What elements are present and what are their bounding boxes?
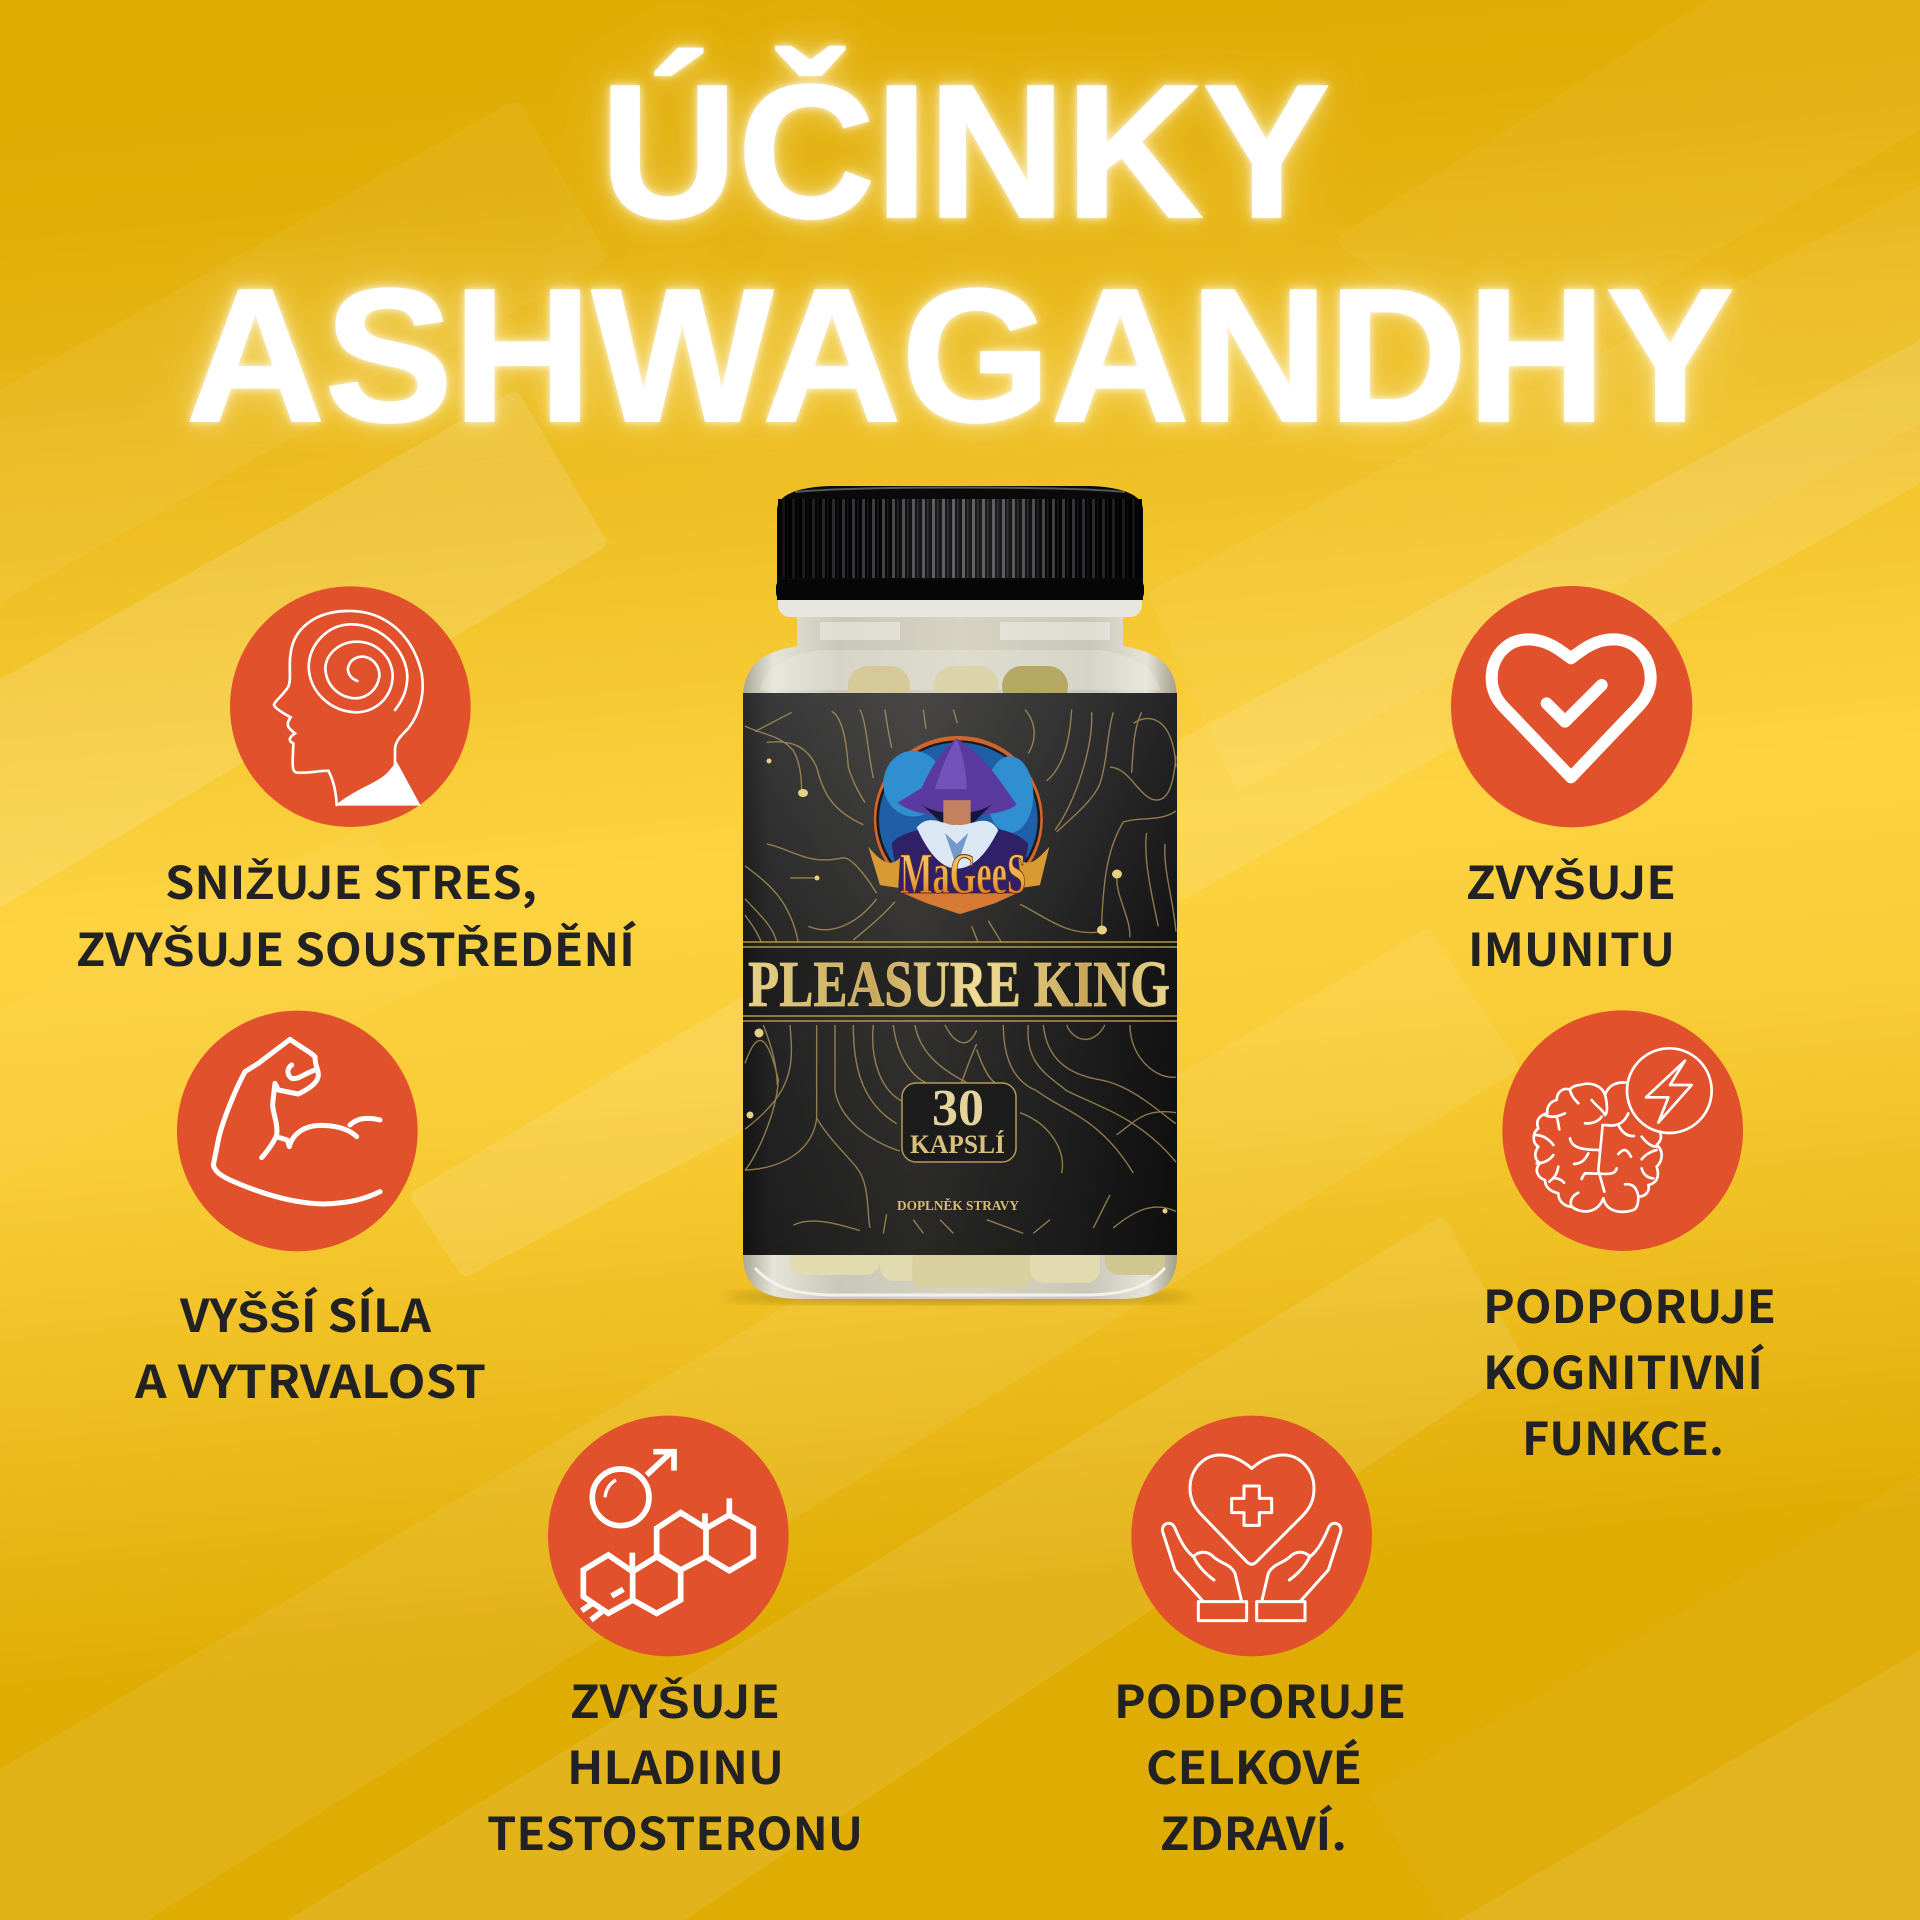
benefit: overall health bbox=[1114, 1416, 1406, 1863]
label: ZVYŠUJE bbox=[570, 1666, 780, 1731]
icon: heart with check bbox=[1451, 586, 1692, 827]
label bbox=[1466, 847, 1676, 979]
label bbox=[743, 693, 1177, 1255]
gold dots bbox=[746, 758, 1168, 1214]
jar base highlight bbox=[755, 1268, 1165, 1295]
label bbox=[134, 1280, 486, 1411]
label: ZVYŠUJE SOUST ŘEDĚNÍ bbox=[76, 914, 636, 979]
product bottle bbox=[723, 486, 1193, 1304]
label bbox=[1114, 1666, 1406, 1863]
benefit: strength bbox=[134, 1011, 486, 1411]
benefit: immunity bbox=[1451, 586, 1692, 979]
label: IMUNITU bbox=[1468, 914, 1675, 979]
label bbox=[76, 847, 636, 979]
band lines bbox=[743, 942, 1177, 1021]
neck ring bbox=[778, 590, 1142, 617]
icon: head with spiral bbox=[230, 586, 471, 827]
title: ASHWAGANDHY bbox=[186, 250, 1734, 462]
icon: hands holding heart bbox=[1131, 1416, 1372, 1656]
benefit: cognition bbox=[1483, 1010, 1776, 1468]
benefit: stress bbox=[76, 586, 636, 979]
label: CELKOVÉ bbox=[1146, 1732, 1362, 1797]
icon: flexed arm bbox=[177, 1011, 418, 1251]
label: VYŠŠÍ SÍLA bbox=[179, 1280, 432, 1345]
label: ZDRAVÍ. bbox=[1160, 1798, 1347, 1863]
label bbox=[487, 1666, 863, 1863]
label: PODPORUJE bbox=[1114, 1666, 1406, 1731]
gold contour lines bbox=[745, 710, 1176, 1233]
logo: wizard bbox=[868, 736, 1049, 914]
capsules top bbox=[848, 666, 1068, 706]
capsule count box bbox=[902, 1080, 1016, 1162]
capsules bottom bbox=[790, 1245, 1165, 1288]
icon: male symbol and steroid molecule bbox=[548, 1416, 789, 1656]
label: KOGNITIVNÍ bbox=[1483, 1337, 1764, 1402]
title: ÚČINKY bbox=[600, 46, 1330, 258]
label bbox=[1483, 1271, 1776, 1468]
logo wordmark: MaGeeS bbox=[900, 841, 1026, 906]
title bbox=[186, 46, 1734, 462]
icon: brain with lightning bbox=[1502, 1010, 1743, 1251]
capsule count box: KAPSLÍ bbox=[910, 1130, 1005, 1159]
label: FUNKCE. bbox=[1522, 1403, 1724, 1468]
label: ZVYŠUJE bbox=[1466, 847, 1676, 912]
label: A VYTRVALOST bbox=[134, 1346, 486, 1411]
glass jar bbox=[743, 612, 1177, 1299]
capsule count box: 30 bbox=[932, 1080, 984, 1137]
supplement note: DOPLNĚK STRAVY bbox=[897, 1197, 1019, 1214]
label: SNIŽUJE STRES, bbox=[165, 847, 537, 912]
label: TESTOSTERONU bbox=[487, 1798, 863, 1863]
cap bbox=[776, 486, 1144, 600]
label: HLADINU bbox=[567, 1732, 784, 1797]
label: PODPORUJE bbox=[1483, 1271, 1776, 1336]
product name: PLEASURE KING bbox=[748, 948, 1170, 1021]
benefit: testosterone bbox=[487, 1416, 863, 1863]
